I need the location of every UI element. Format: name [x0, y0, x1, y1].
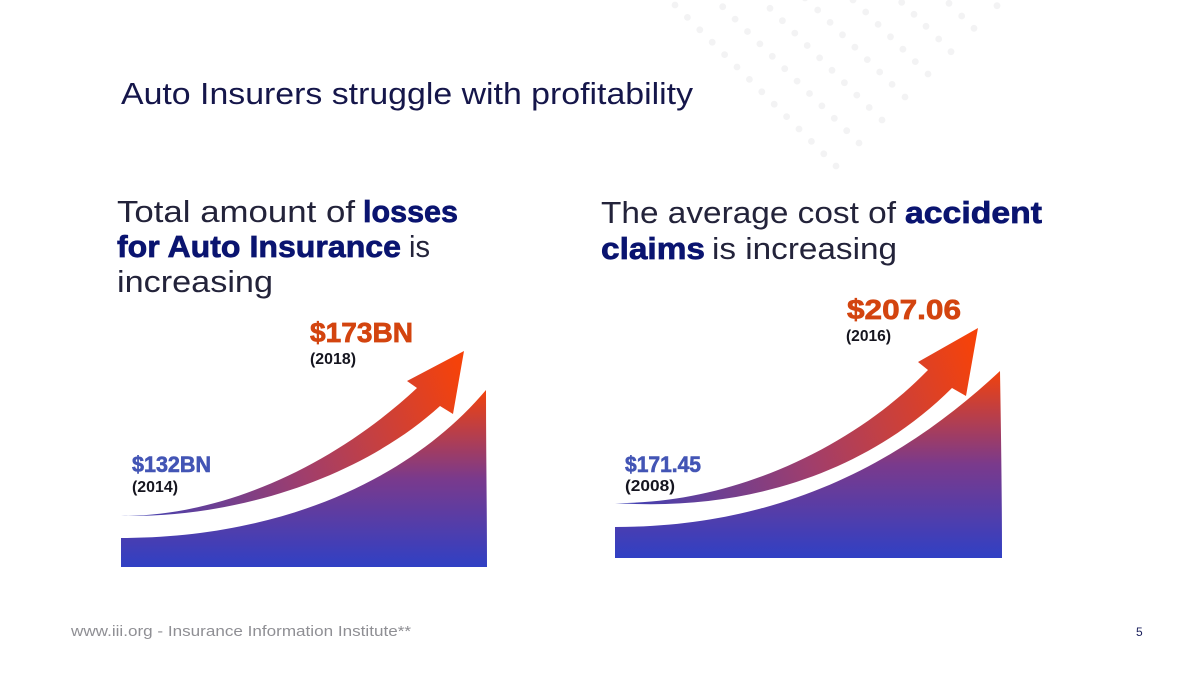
- value: 207.06: $207.06: [847, 294, 961, 325]
- year: 2008: (2008): [625, 478, 675, 495]
- page number: 5: [1136, 625, 1143, 639]
- area: claims growth: [615, 371, 1002, 558]
- heading: accident claims: is increasing: [712, 231, 897, 266]
- year: 2014: (2014): [132, 479, 178, 496]
- title: Auto Insurers struggle with profitability: [121, 76, 694, 111]
- source footer: www.iii.org - Insurance Information Institute**: [70, 623, 411, 640]
- year: 2018: (2018): [310, 351, 356, 368]
- heading: losses: for Auto Insurance: [117, 229, 401, 264]
- heading: losses: increasing: [117, 264, 273, 299]
- heading: accident claims: The average cost of: [601, 195, 896, 230]
- chart: total losses: [121, 317, 487, 567]
- area: losses growth: [121, 390, 487, 567]
- year: 2016: (2016): [846, 328, 891, 345]
- value: 171.45: $171.45: [625, 452, 701, 477]
- heading: losses: losses: [363, 194, 458, 229]
- heading: accident claims: accident: [905, 195, 1042, 230]
- heading: losses: Total amount of: [117, 194, 355, 229]
- heading: accident claims: claims: [601, 231, 705, 266]
- chart: accident claims: [615, 294, 1002, 558]
- heading: losses: is: [409, 229, 430, 264]
- arrow: claims growth: [615, 328, 978, 504]
- arrow: losses growth: [121, 351, 464, 516]
- value: 132BN: $132BN: [132, 452, 211, 477]
- value: 173BN: $173BN: [310, 317, 413, 348]
- heading: losses: [117, 194, 458, 299]
- heading: accident claims: [601, 195, 1042, 266]
